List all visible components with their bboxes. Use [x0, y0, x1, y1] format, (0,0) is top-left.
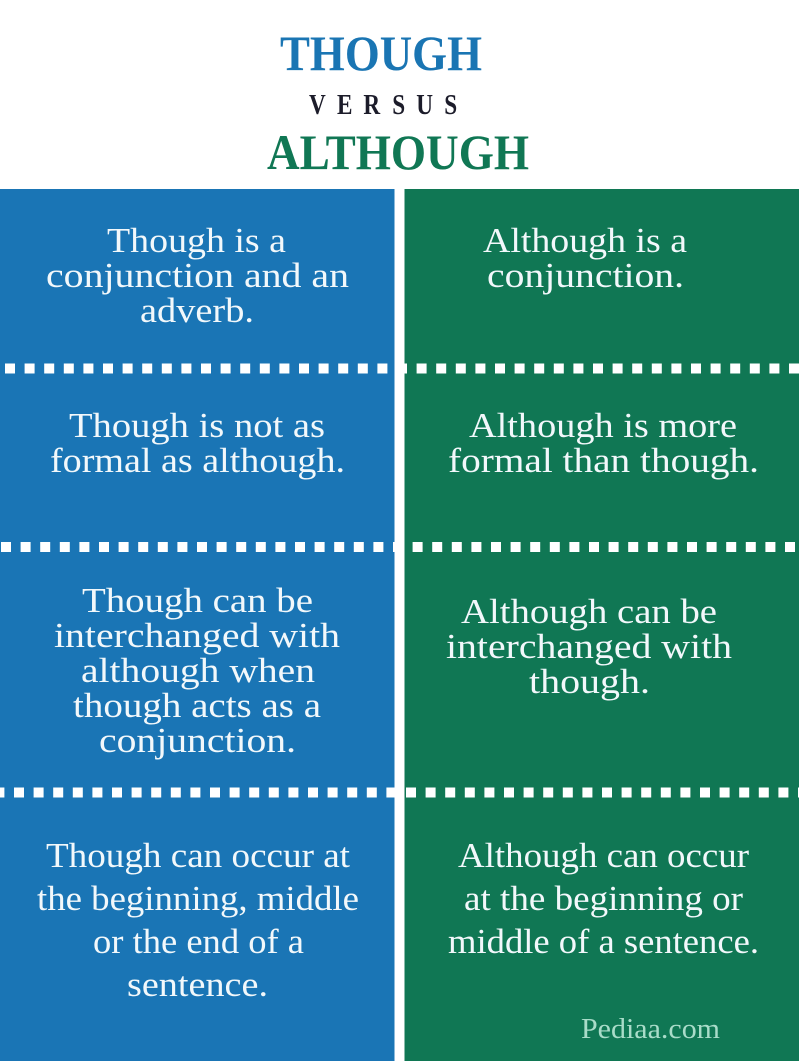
- text: although row 2: Although is more: [469, 406, 737, 445]
- text: though row 3: although when: [81, 651, 315, 690]
- text: though row 4: Though can occur at: [46, 836, 350, 875]
- text: though row 1: Though is a: [107, 221, 286, 260]
- text: though row 4: [37, 836, 359, 1004]
- text: though row 3: though acts as a: [73, 686, 322, 725]
- text: although row 1: Although is a: [483, 221, 687, 260]
- text: though row 1: [46, 221, 349, 330]
- text: though row 2: Though is not as: [69, 406, 325, 445]
- text: though row 2: [50, 406, 345, 480]
- text: though row 1: adverb.: [140, 291, 254, 330]
- subtitle: versus: VERSUS: [309, 89, 457, 121]
- title: Although: ALTHOUGH: [267, 124, 529, 180]
- text: though row 3: interchanged with: [54, 616, 341, 655]
- text: although row 2: [448, 406, 759, 480]
- text: though row 4: or the end of a: [93, 922, 304, 961]
- text: although row 4: at the beginning or: [464, 879, 743, 918]
- title: Though: THOUGH: [280, 25, 482, 81]
- title block: [267, 25, 529, 180]
- watermark: Pediaa.com: Pediaa.com: [581, 1013, 720, 1045]
- text: though row 3: conjunction.: [99, 721, 296, 760]
- text: although row 1: conjunction.: [487, 256, 684, 295]
- text: although row 4: middle of a sentence.: [448, 922, 759, 961]
- text: though row 3: Though can be: [82, 581, 313, 620]
- text: although row 3: Although can be: [461, 592, 717, 631]
- text: though row 4: sentence.: [127, 965, 268, 1004]
- text: although row 4: Although can occur: [458, 836, 749, 875]
- text: although row 2: formal than though.: [448, 441, 759, 480]
- text: although row 1: [483, 221, 687, 295]
- text: although row 3: though.: [529, 662, 650, 701]
- text: though row 3: [54, 581, 341, 760]
- text: although row 4: [448, 836, 759, 961]
- text: although row 3: interchanged with: [446, 627, 733, 666]
- text: though row 1: conjunction and an: [46, 256, 349, 295]
- text: though row 2: formal as although.: [50, 441, 345, 480]
- text: though row 4: the beginning, middle: [37, 879, 359, 918]
- panel: although column: [404, 189, 799, 1061]
- text: although row 3: [446, 592, 733, 701]
- panel: though column: [0, 189, 394, 1061]
